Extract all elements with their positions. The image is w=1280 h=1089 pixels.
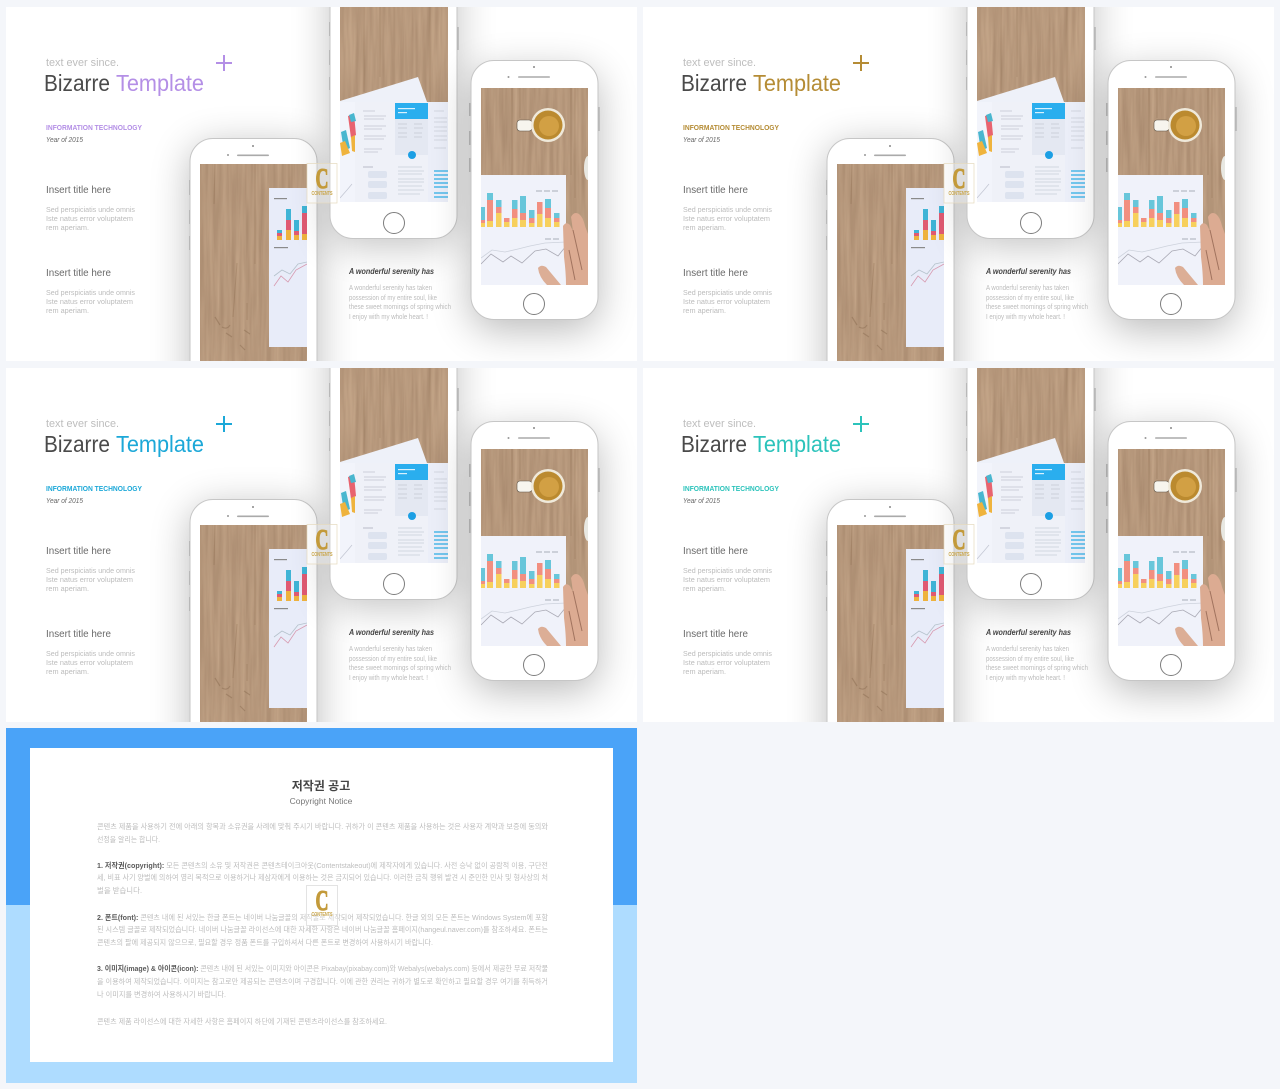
phone: right: [469, 422, 600, 691]
watermark logo: [944, 163, 974, 203]
panel: slide 3 blue: [6, 368, 637, 722]
text block: serenity: possession of my entire soul, like: [986, 295, 1074, 302]
text block 2: Insert title here: [683, 268, 748, 279]
notice clause 2: 된 시스템 글꼴로 제작되었습니다. 네이버 나눔글꼴 라이선스에 대한 자세한 사항은 네이버 나눔글꼴 홈페이지(hangeul.naver.com)를 참조하세요. 폰트는: [97, 924, 548, 934]
text block 2: rem aperiam.: [683, 308, 726, 315]
title: Bizarre: [44, 70, 110, 96]
text block: serenity: possession of my entire soul, like: [349, 656, 437, 663]
notice clause 1: 세, 비표 사기 양벌에 의하여 영리 목적으로 이용하거나 제삼자에게 이용하는 것은 금지되어 있습니다. 이러한 금칙 행위 발견 시 준민한 민사 및 형사상의 처: [97, 872, 548, 882]
text block 1: rem aperiam.: [46, 225, 89, 232]
phone: centre: [329, 0, 459, 246]
text block 2: Iste natus error voluptatem: [683, 660, 770, 667]
text block: serenity: I enjoy with my whole heart. !: [986, 675, 1065, 682]
text block 1: rem aperiam.: [683, 586, 726, 593]
text block 2: Iste natus error voluptatem: [46, 660, 133, 667]
panel: slide 2 gold: [643, 7, 1274, 361]
text block 2: Iste natus error voluptatem: [46, 299, 133, 306]
text block 2: Sed perspiciatis unde omnis: [683, 290, 772, 297]
year: Year of 2015: [46, 498, 83, 505]
notice closing line: 콘텐츠 제품 라이선스에 대한 자세한 사항은 홈페이지 하단에 기재된 콘텐츠라이선스를 참조하세요.: [97, 1016, 387, 1026]
title: [46, 74, 203, 96]
notice clause 2: 콘텐츠의 팔에 제공되지 않으므로, 필요할 경우 정품 폰트를 구입하셔서 다른 폰트로 변경하여 사용하시기 바랍니다.: [97, 937, 433, 947]
text block 1: [683, 185, 772, 232]
notice clause 2: 2. 폰트(font): 콘텐츠 내에 된 서있는 한글 폰트는 네이버 나눔글꼴의 저작물로 제작되어 제작되었습니다. 한글 외의 모든 폰트는 Windows System에 포함: [97, 912, 548, 922]
text block: serenity: [348, 266, 451, 321]
text block: serenity: I enjoy with my whole heart. !: [986, 314, 1065, 321]
notice clause 1: 1. 저작권(copyright): 모든 콘텐츠의 소유 및 저작권은 콘텐츠테이크아웃(Contentstakeout)에 제작자에게 있습니다. 사전 승낙 없이 공람적 이용, 구단전: [97, 860, 548, 870]
eyebrow: text ever since.: [46, 418, 119, 430]
text block 2: Insert title here: [46, 629, 111, 640]
text block: serenity: [985, 627, 1088, 682]
watermark logo: [307, 163, 337, 203]
text block 1: [46, 185, 135, 232]
text block: serenity: these sweet mornings of spring which: [986, 665, 1088, 672]
title: Template: [116, 431, 204, 457]
title: Template: [116, 70, 204, 96]
text block: serenity: I enjoy with my whole heart. !: [349, 314, 428, 321]
panel: copyright notice: [6, 728, 637, 1083]
icon: plus: [216, 416, 232, 432]
phone: right: [1106, 422, 1237, 691]
text block 1: Sed perspiciatis unde omnis: [683, 568, 772, 575]
text block: serenity: A wonderful serenity has taken: [349, 285, 432, 292]
category: INFORMATION TECHNOLOGY: [46, 125, 142, 132]
text block: serenity: these sweet mornings of spring which: [986, 304, 1088, 311]
text block: serenity: I enjoy with my whole heart. !: [349, 675, 428, 682]
notice intro: [97, 821, 548, 844]
eyebrow: text ever since.: [46, 57, 119, 69]
text block 1: Sed perspiciatis unde omnis: [683, 207, 772, 214]
phone: left: [826, 500, 954, 787]
category: INFORMATION TECHNOLOGY: [683, 486, 779, 493]
phone: right: [1106, 60, 1237, 330]
text block 1: Iste natus error voluptatem: [46, 577, 133, 584]
text block 1: Sed perspiciatis unde omnis: [46, 207, 135, 214]
watermark logo: CONTENTS: [948, 191, 970, 197]
title: Bizarre: [44, 431, 110, 457]
phone: centre: [966, 0, 1096, 246]
notice clause 3: 3. 이미지(image) & 아이콘(icon): 콘텐츠 내에 된 서있는 이미지와 아이콘은 Pixabay(pixabay.com)와 Webalys(webalys.com) 등에서 제공한 무료 저작물: [97, 963, 548, 973]
notice clause 3: 나 이미지를 변경하여 사용하시기 바랍니다.: [97, 989, 226, 999]
phone: right: [469, 60, 600, 330]
text block 1: Iste natus error voluptatem: [683, 577, 770, 584]
phone: left: [189, 138, 317, 426]
watermark logo: C: [952, 524, 966, 556]
text block 2: rem aperiam.: [683, 669, 726, 676]
text block 2: Sed perspiciatis unde omnis: [46, 290, 135, 297]
text block 2: rem aperiam.: [46, 669, 89, 676]
year: Year of 2015: [683, 137, 720, 144]
text block: serenity: A wonderful serenity has: [985, 627, 1071, 637]
year: Year of 2015: [683, 498, 720, 505]
title: Template: [753, 431, 841, 457]
icon: plus: [216, 55, 232, 71]
text block: serenity: these sweet mornings of spring which: [349, 304, 451, 311]
notice intro: 콘텐츠 제품을 사용하기 전에 아래의 항목과 소유권을 사례에 맞춰 주시기 바랍니다. 귀하가 이 콘텐츠 제품을 사용하는 것은 사용자 계약과 보증에 동의와: [97, 821, 548, 831]
year: Year of 2015: [46, 137, 83, 144]
title: [46, 435, 203, 457]
text block 2: Sed perspiciatis unde omnis: [46, 651, 135, 658]
watermark logo: [944, 524, 974, 564]
text block: serenity: A wonderful serenity has: [985, 266, 1071, 276]
text block 1: [683, 546, 772, 593]
text block 1: Iste natus error voluptatem: [46, 216, 133, 223]
notice clause 3: [97, 963, 548, 999]
eyebrow: text ever since.: [683, 57, 756, 69]
text block 1: [46, 546, 135, 593]
title: [681, 431, 841, 457]
panel: slide 4 teal: [643, 368, 1274, 722]
watermark logo: notice: [306, 885, 338, 926]
panel: slide 1 purple: [6, 7, 637, 361]
text block 2: Iste natus error voluptatem: [683, 299, 770, 306]
phone: left: [826, 138, 954, 426]
text block 1: Sed perspiciatis unde omnis: [46, 568, 135, 575]
text block: serenity: possession of my entire soul, like: [986, 656, 1074, 663]
text block: serenity: these sweet mornings of spring which: [349, 665, 451, 672]
watermark logo: C: [316, 163, 328, 195]
category: INFORMATION TECHNOLOGY: [46, 486, 142, 493]
title: Bizarre: [681, 70, 747, 96]
text block 1: Iste natus error voluptatem: [683, 216, 770, 223]
notice clause 3: 을 이용하여 제작되었습니다. 이미지는 참고로만 제공되는 콘텐츠이며 구경합니다. 이에 관한 권리는 귀하가 별도로 확인하고 필요할 경우 여기를 취득하거: [97, 976, 548, 986]
watermark logo: notice: CONTENTS: [312, 912, 333, 918]
text block 1: rem aperiam.: [683, 225, 726, 232]
watermark logo: C: [316, 524, 328, 556]
phone: left: [189, 500, 317, 787]
icon: plus: [853, 416, 869, 432]
notice heading: 저작권 공고: [292, 778, 350, 793]
title: Template: [753, 70, 841, 96]
watermark logo: [307, 524, 337, 564]
watermark logo: CONTENTS: [948, 552, 970, 558]
text block: serenity: A wonderful serenity has taken: [349, 646, 432, 653]
notice clause 1: 벌을 받습니다.: [97, 885, 142, 895]
notice subheading: Copyright Notice: [290, 796, 353, 806]
text block: serenity: [348, 627, 451, 682]
text block 2: [46, 268, 135, 315]
watermark logo: notice: C: [316, 885, 328, 917]
title: Bizarre: [681, 431, 747, 457]
icon: plus: [853, 55, 869, 71]
text block: serenity: A wonderful serenity has: [348, 627, 434, 637]
text block 1: Insert title here: [46, 185, 111, 196]
category: INFORMATION TECHNOLOGY: [683, 125, 779, 132]
text block 2: Insert title here: [46, 268, 111, 279]
text block 2: Insert title here: [683, 629, 748, 640]
text block 2: [46, 629, 135, 676]
phone: centre: [966, 301, 1096, 607]
eyebrow: text ever since.: [683, 418, 756, 430]
text block 1: Insert title here: [683, 546, 748, 557]
text block: serenity: possession of my entire soul, like: [349, 295, 437, 302]
watermark logo: CONTENTS: [312, 191, 333, 197]
notice clause 2: [97, 912, 548, 947]
notice intro: 선정을 알리는 합니다.: [97, 834, 160, 844]
text block: serenity: A wonderful serenity has taken: [986, 646, 1069, 653]
notice clause 1: [97, 860, 548, 895]
phone: centre: [329, 301, 459, 607]
text block 2: Sed perspiciatis unde omnis: [683, 651, 772, 658]
watermark logo: C: [952, 163, 966, 195]
text block 2: [683, 629, 772, 676]
text block: serenity: A wonderful serenity has taken: [986, 285, 1069, 292]
watermark logo: CONTENTS: [312, 552, 333, 558]
text block 1: rem aperiam.: [46, 586, 89, 593]
text block 2: [683, 268, 772, 315]
title: [682, 74, 840, 96]
text block 2: rem aperiam.: [46, 308, 89, 315]
text block: serenity: [985, 266, 1088, 321]
text block: serenity: A wonderful serenity has: [348, 266, 434, 276]
text block 1: Insert title here: [683, 185, 748, 196]
text block 1: Insert title here: [46, 546, 111, 557]
